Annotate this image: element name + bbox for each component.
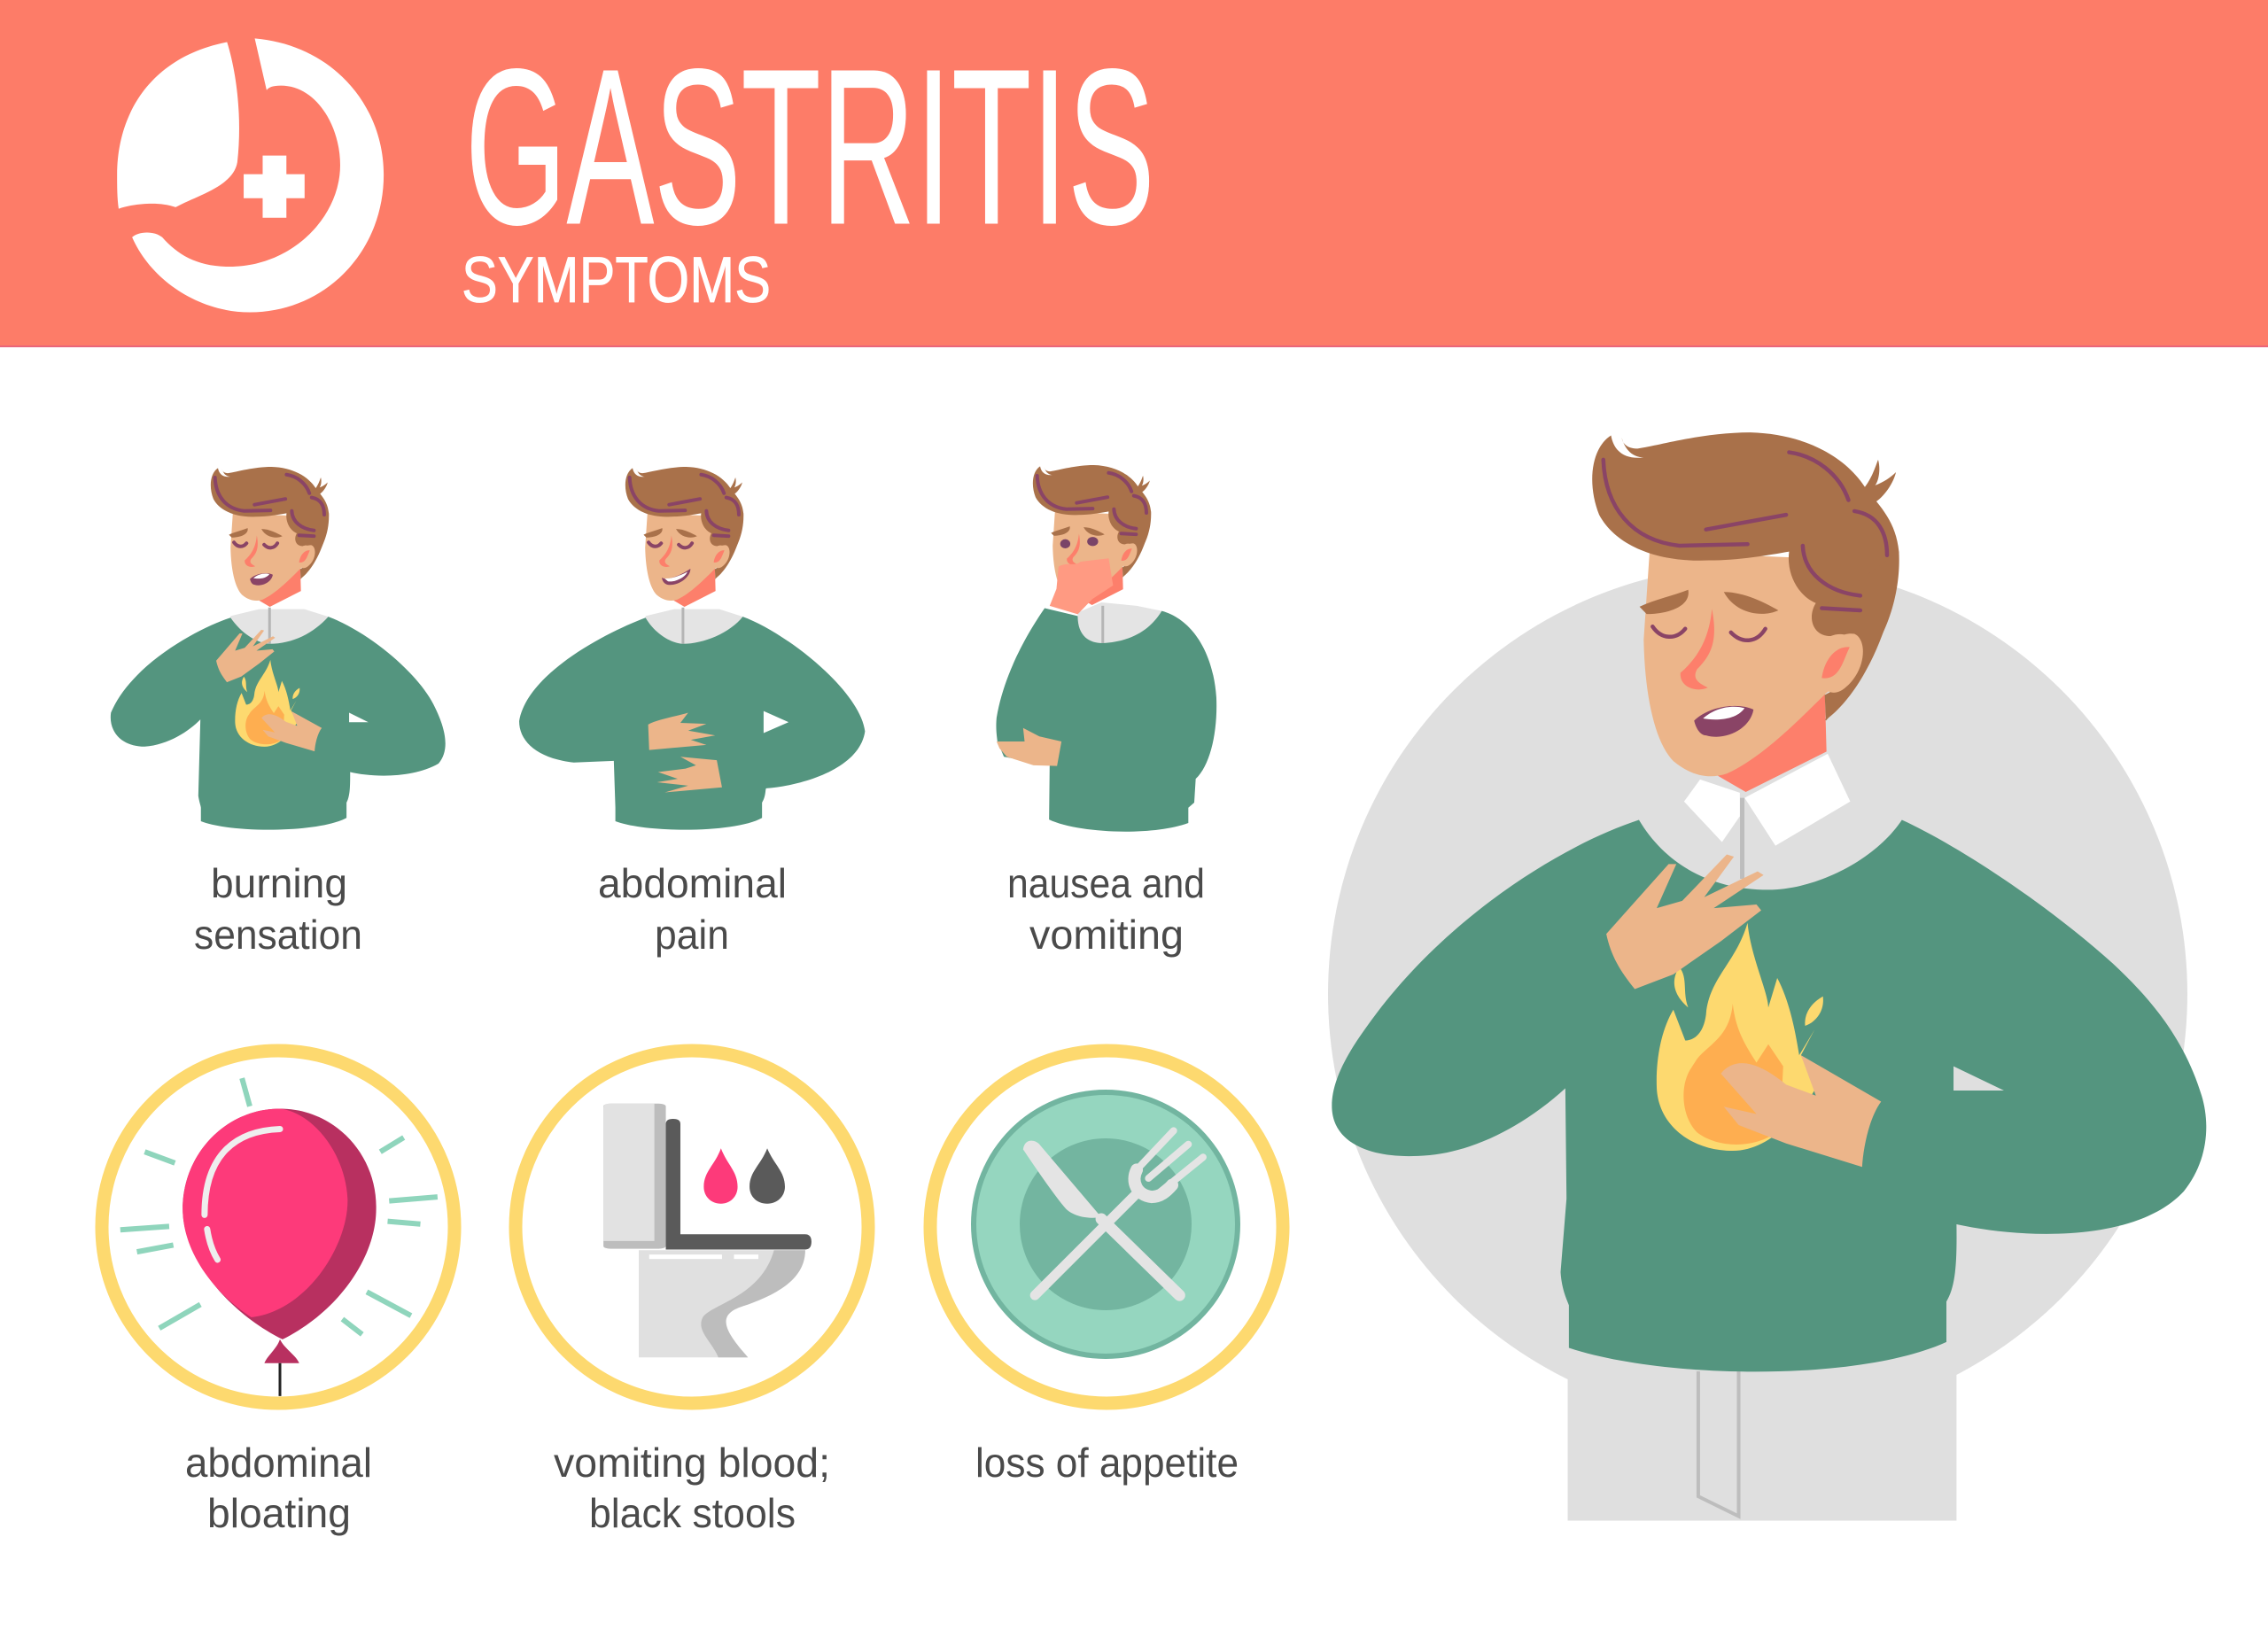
label: vomiting blood; black stools xyxy=(554,1440,830,1536)
shirt collar xyxy=(1684,754,1850,879)
flame xyxy=(1657,923,1823,1151)
label: nausea and vomiting: nausea and xyxy=(1007,860,1205,906)
header banner xyxy=(0,0,2268,347)
lower hand xyxy=(1720,1055,1881,1167)
label: burning sensation: burning xyxy=(211,860,347,906)
title: GASTRITIS xyxy=(465,24,1155,271)
figure: nausea and vomiting xyxy=(996,465,1216,832)
upper hand xyxy=(1606,855,1764,989)
figure: abdominal pain xyxy=(519,467,865,830)
label: abdominal pain: abdominal xyxy=(598,860,787,906)
open mouth xyxy=(1694,706,1753,737)
subtitle: SYMPTOMS xyxy=(462,245,771,316)
label: nausea and vomiting xyxy=(1007,860,1205,958)
figure: burning sensation xyxy=(111,467,446,830)
label: vomiting blood; black stools: black stools xyxy=(589,1490,796,1536)
label: burning sensation: sensation xyxy=(194,912,362,958)
icon: balloon in ring xyxy=(102,1051,454,1403)
icon: toilet in ring xyxy=(516,1051,868,1403)
label: abdominal bloating: abdominal xyxy=(185,1440,372,1486)
label: abdominal pain: pain xyxy=(655,912,729,958)
label: loss of appetite: loss of appetite xyxy=(975,1440,1239,1486)
label: nausea and vomiting: vomiting xyxy=(1029,912,1184,958)
label: burning sensation xyxy=(194,860,362,958)
icon: plate with crossed cutlery in ring xyxy=(930,1051,1283,1403)
label: abdominal pain xyxy=(598,860,787,958)
label: vomiting blood; black stools: vomiting blood; xyxy=(554,1440,830,1486)
label: abdominal bloating: bloating xyxy=(207,1490,351,1536)
closed eyes xyxy=(1652,626,1766,640)
label: abdominal bloating xyxy=(185,1440,372,1536)
icon: stomach logo xyxy=(117,38,384,313)
illustration: large man with heartburn xyxy=(1328,432,2206,1521)
head xyxy=(1592,432,1899,792)
